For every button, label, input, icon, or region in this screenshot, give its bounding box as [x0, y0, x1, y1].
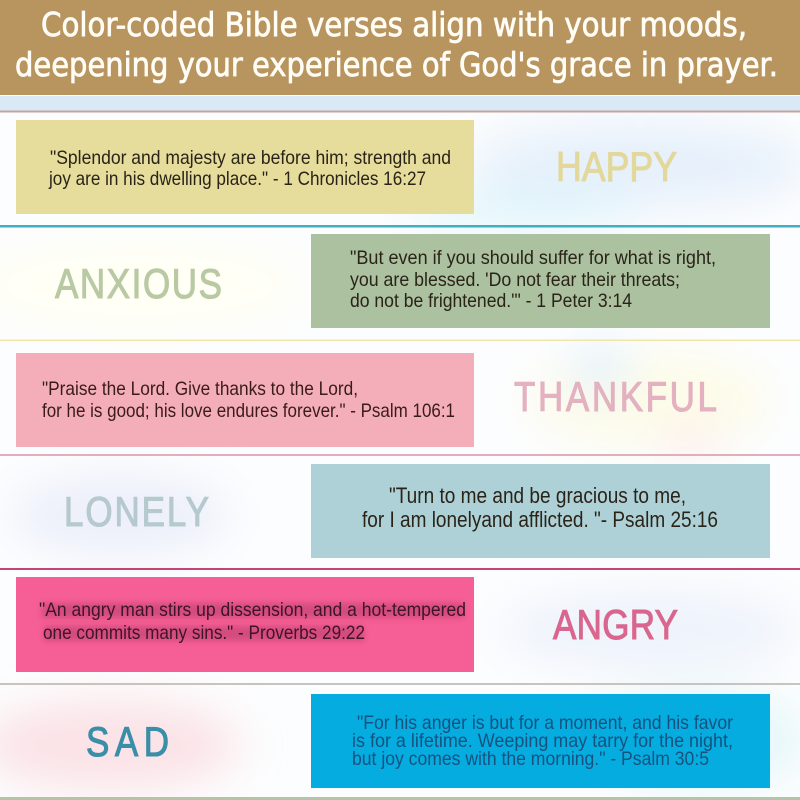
- mood label: thankful: THANKFUL: [514, 374, 717, 421]
- verse text: sad: is for a lifetime. Weeping may tarry for the night,: [352, 730, 733, 752]
- title banner: [0, 0, 800, 95]
- verse text: thankful: for he is good; his love endures forever." - Psalm 106:1: [42, 400, 455, 422]
- verse text: anxious: "But even if you should suffer for what is right,: [350, 247, 716, 269]
- mood label: lonely: LONELY: [64, 489, 209, 536]
- verse text: anxious: [350, 247, 716, 312]
- verse text: anxious: do not be frightened.'" - 1 Peter 3:14: [350, 290, 632, 312]
- verse box: thankful: [16, 353, 474, 447]
- verse text: lonely: for I am lonelyand afflicted. "- Psalm 25:16: [362, 507, 718, 532]
- panel: angry: [16, 577, 678, 672]
- verse text: angry: one commits many sins." - Proverbs 29:22: [43, 622, 365, 644]
- verse text: anxious: you are blessed. 'Do not fear their threats;: [350, 269, 680, 291]
- verse text: happy: [48, 147, 451, 190]
- verse text: sad: "For his anger is but for a moment, and his favor: [357, 712, 733, 734]
- verse text: happy: "Splendor and majesty are before him; strength and: [50, 147, 451, 169]
- mood label: happy: HAPPY: [556, 144, 677, 191]
- verse text shadow: angry: [42, 603, 464, 641]
- verse text: sad: but joy comes with the morning." - Psalm 30:5: [352, 748, 709, 770]
- panel: anxious: [55, 234, 770, 328]
- verse text: lonely: "Turn to me and be gracious to me,: [389, 483, 686, 508]
- panel: thankful: [16, 353, 717, 447]
- panel: lonely: [64, 464, 770, 558]
- verse text: sad: [352, 712, 733, 770]
- verse box: anxious: [311, 234, 770, 328]
- verse text: happy: joy are in his dwelling place." - 1 Chronicles 16:27: [48, 168, 426, 190]
- mood label: angry: ANGRY: [553, 602, 678, 649]
- verse text: thankful: [42, 378, 455, 422]
- mood label: anxious: ANXIOUS: [55, 261, 222, 308]
- panel: happy: [16, 120, 677, 214]
- verse box: happy: [16, 120, 474, 214]
- panel: sad: [86, 694, 770, 788]
- mood label: sad: SAD: [86, 719, 169, 766]
- verse box: angry: [16, 577, 474, 672]
- verse text: thankful: "Praise the Lord. Give thanks to the Lord,: [42, 378, 358, 400]
- verse text: angry: [39, 599, 466, 644]
- verse box: lonely: [311, 464, 770, 558]
- verse box: sad: [311, 694, 770, 788]
- sky strip under the banner: [0, 96, 800, 111]
- verse text: angry: "An angry man stirs up dissension, and a hot-tempered: [39, 599, 466, 621]
- verse text: lonely: [362, 483, 718, 532]
